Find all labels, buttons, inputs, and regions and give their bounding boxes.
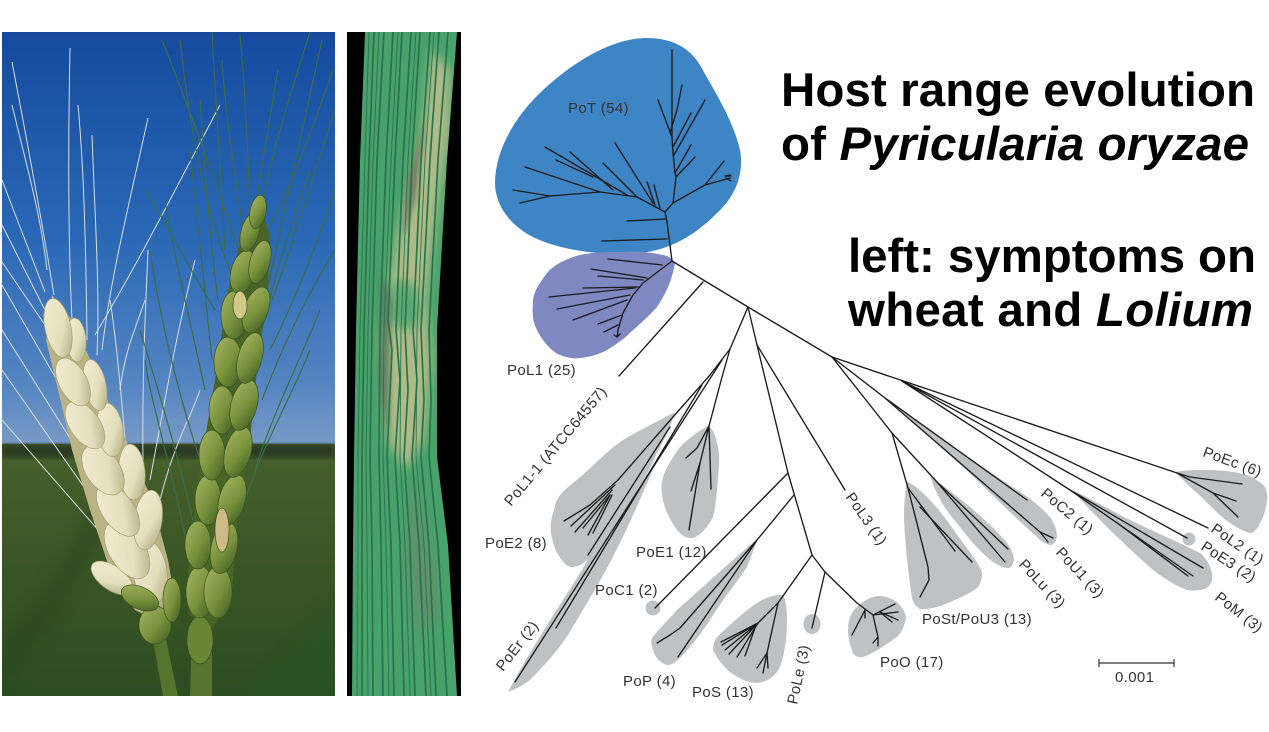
tree branches: main backbone <box>515 261 845 682</box>
clade labels: PoL1-1 (ATCC64557) <box>501 384 611 510</box>
clade labels: PoS (13) <box>692 684 754 701</box>
clade labels: PoL1 (25) <box>507 362 576 379</box>
clade labels: PoL3 (1) <box>842 490 890 549</box>
clade labels: PoEr (2) <box>493 618 542 674</box>
clade labels <box>485 100 1267 706</box>
panel: phylogenetic tree <box>485 38 1267 706</box>
clade labels: PoEc (6) <box>1201 444 1264 481</box>
title <box>781 64 1255 171</box>
clade labels: PoE1 (12) <box>636 544 707 561</box>
tree branches: PoC1, PoP, PoS, PoLe, PoO <box>655 473 898 673</box>
clade blobs: grey groups <box>508 398 1267 692</box>
subtitle: left: symptoms on <box>848 230 1256 283</box>
tree branches: right clades <box>832 357 1242 597</box>
title: Host range evolution <box>781 64 1255 117</box>
clade labels: PoM (3) <box>1212 589 1266 637</box>
clade labels: PoLu (3) <box>1015 556 1069 612</box>
clade labels: PoE2 (8) <box>485 535 547 552</box>
scale bar: 0.001 <box>1115 669 1154 686</box>
clade labels: PoL2 (1) <box>1208 520 1267 569</box>
clade labels: PoLe (3) <box>784 643 813 706</box>
tree branches: PoT <box>513 50 731 261</box>
right green spike <box>185 194 275 696</box>
clade labels: PoC1 (2) <box>595 582 658 599</box>
clade blob: PoT <box>495 38 741 254</box>
clade labels: PoT (54) <box>568 100 629 117</box>
title: of Pyricularia oryzae <box>781 118 1249 171</box>
clade labels: PoSt/PoU3 (13) <box>922 611 1032 628</box>
clade blob: PoL1 <box>533 252 675 358</box>
clade labels: PoO (17) <box>880 654 944 671</box>
tree branches: PoL1 <box>549 259 672 337</box>
scale bar <box>1099 659 1174 686</box>
clade labels: PoP (4) <box>623 673 676 690</box>
photo: Lolium leaf with lesion <box>347 32 461 696</box>
left bleached spike <box>39 295 178 696</box>
tree branches: PoE2 and PoE1 <box>564 426 711 535</box>
subtitle: wheat and Lolium <box>847 284 1253 337</box>
clade labels: PoE3 (2) <box>1198 538 1259 586</box>
subtitle <box>847 230 1256 337</box>
photo: wheat spikes with blast symptoms <box>2 32 335 696</box>
clade labels: PoU1 (3) <box>1052 544 1107 602</box>
base florets of left spike <box>117 578 181 644</box>
clade labels: PoC2 (1) <box>1037 485 1096 538</box>
